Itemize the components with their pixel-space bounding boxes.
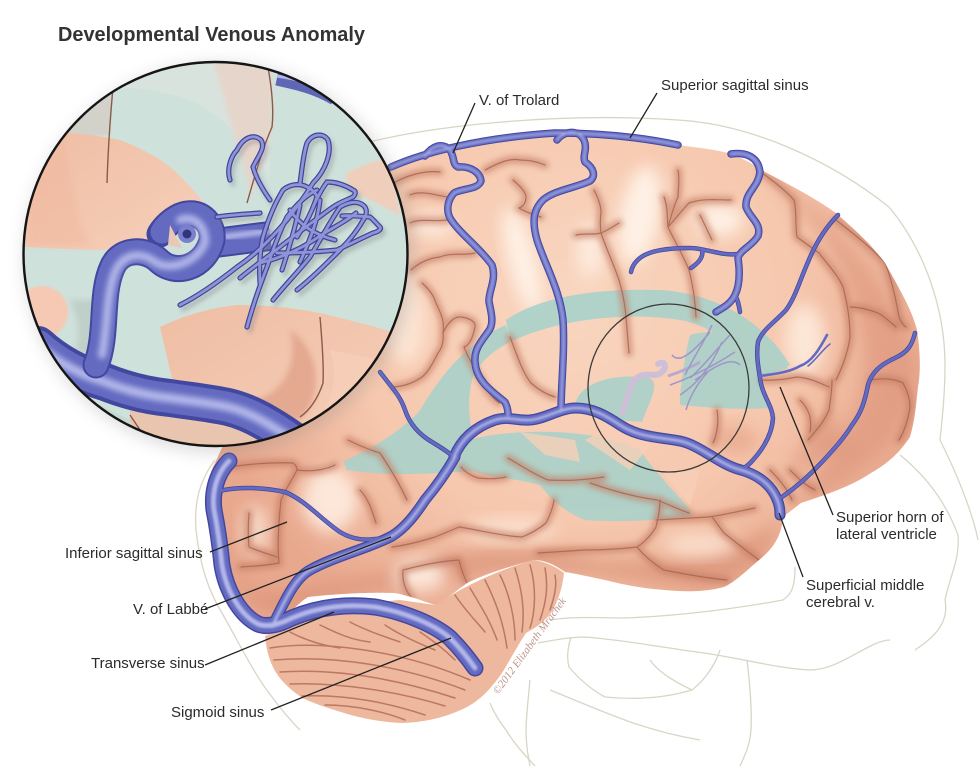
- tangle of small tributaries: [180, 135, 384, 331]
- label: Superficial middle cerebral v.: [779, 513, 924, 611]
- brain: [208, 133, 920, 627]
- label: Superior horn of lateral ventricle: [780, 387, 944, 543]
- inset tissue: [24, 63, 400, 445]
- veins: [209, 132, 915, 668]
- teal ventricle shapes: [344, 290, 790, 521]
- label: Transverse sinus: Transverse sinus: [91, 655, 205, 672]
- gyri creases: [229, 159, 910, 597]
- label: Superior sagittal sinus: Superior sagittal sinus: [661, 77, 809, 94]
- artist signature: ©2012 Elizabeth Mrachek: [491, 595, 570, 697]
- label: Superior sagittal sinus: [630, 77, 809, 138]
- label: V. of Labbé: [133, 537, 391, 618]
- inset grooves: [107, 67, 323, 452]
- large draining vein: [38, 345, 298, 444]
- shading and highlights: [210, 162, 915, 612]
- DVA in lateral view with locator circle: [588, 304, 749, 472]
- curled vein: [96, 214, 270, 365]
- label: V. of Labbé: V. of Labbé: [133, 601, 208, 618]
- label: Sigmoid sinus: Sigmoid sinus: [171, 704, 264, 721]
- label: V. of Trolard: [453, 92, 559, 153]
- label: Inferior sagittal sinus: Inferior sagittal sinus: [65, 545, 203, 562]
- label: Superior horn of lateral ventricle: lateral ventricle: [836, 526, 937, 543]
- label: Superficial middle cerebral v.: Superficial middle: [806, 577, 924, 594]
- label: Transverse sinus: [91, 612, 334, 672]
- label: Sigmoid sinus: [171, 638, 451, 721]
- label: Superior horn of lateral ventricle: Superior horn of: [836, 509, 944, 526]
- label: V. of Trolard: V. of Trolard: [479, 92, 559, 109]
- title: Developmental Venous Anomaly: [58, 24, 366, 46]
- cerebellum: [265, 560, 564, 723]
- head outline: [196, 118, 978, 766]
- label: Inferior sagittal sinus: [65, 522, 287, 562]
- label: Superficial middle cerebral v.: cerebral v.: [806, 594, 875, 611]
- top right vein: [277, 78, 335, 98]
- inset circle: magnified anomaly: [16, 50, 420, 460]
